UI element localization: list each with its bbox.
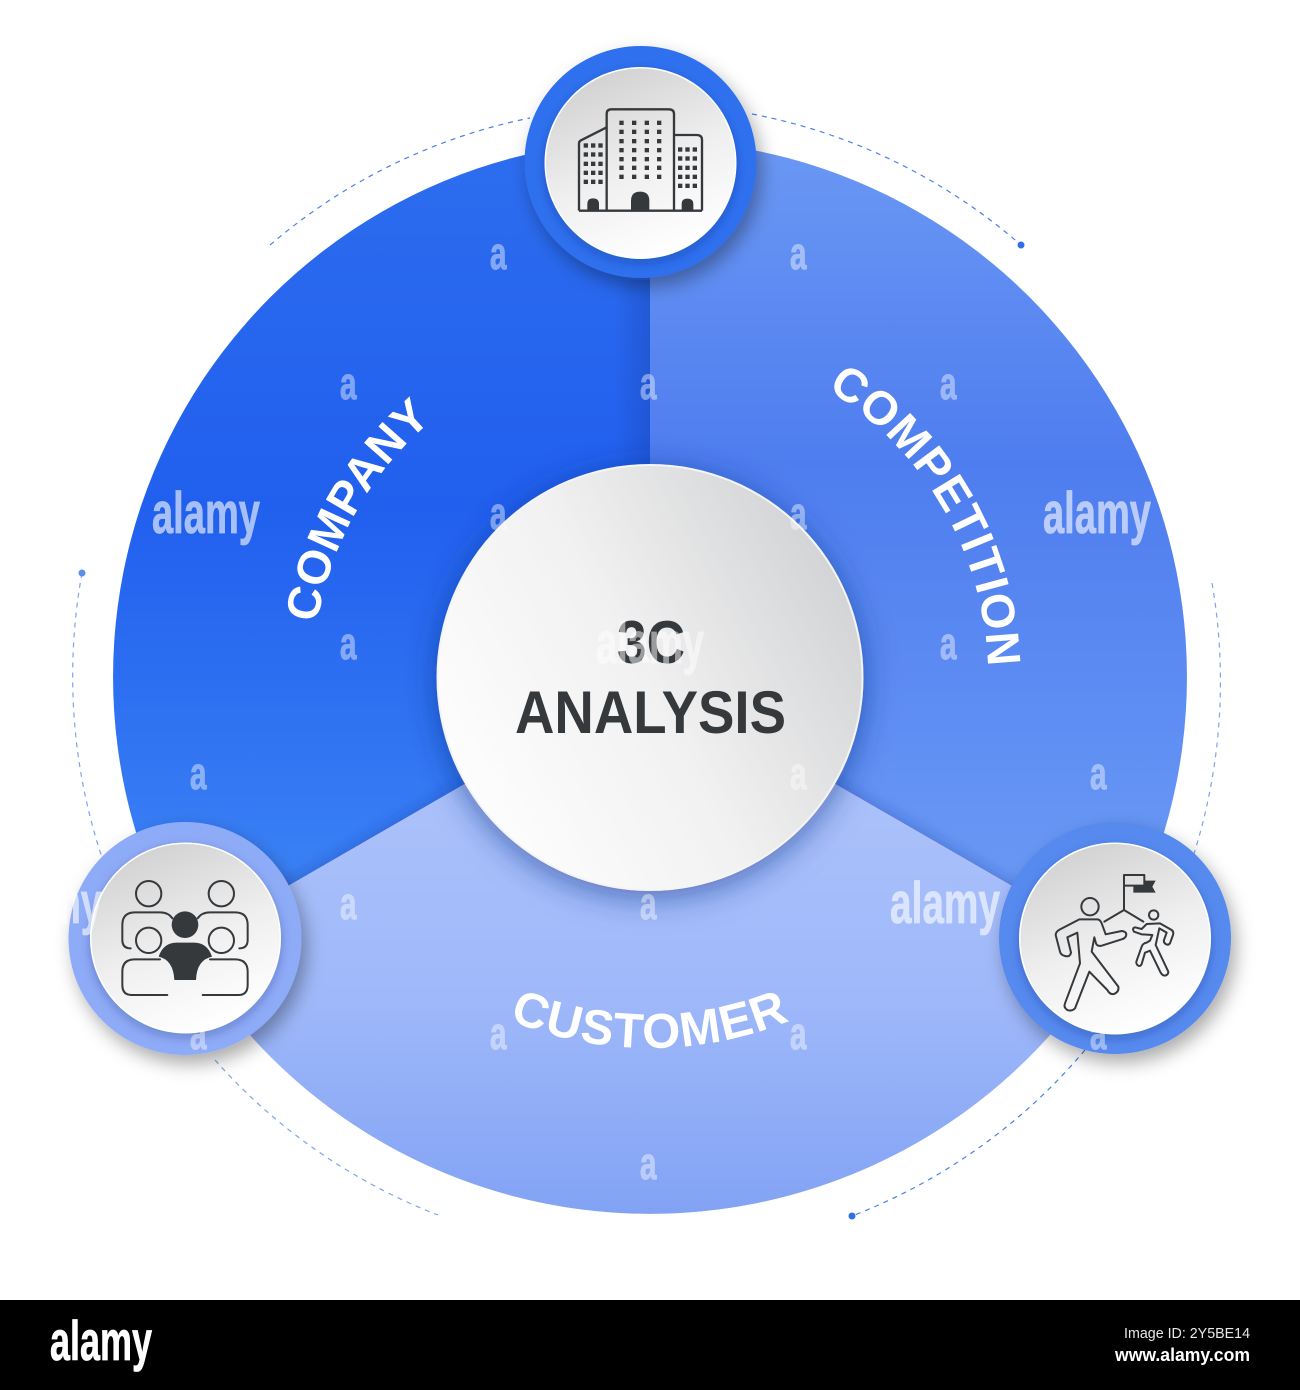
watermark overlay: a [790, 1009, 807, 1060]
badge: company building [524, 46, 756, 278]
watermark overlay: a [340, 359, 357, 410]
watermark overlay: a [1090, 749, 1107, 800]
watermark overlay: alamy [152, 481, 260, 546]
watermark overlay: a [490, 229, 507, 280]
badge: customer people [68, 822, 302, 1055]
panel: competition sector [650, 140, 1187, 946]
center title: 3C [617, 609, 685, 676]
label: customer: CUSTOMER [515, 993, 789, 1048]
watermark overlay: a [640, 879, 657, 930]
panel: customer sector [250, 780, 1050, 1214]
watermark overlay: a [190, 749, 207, 800]
watermark overlay: a [1090, 1009, 1107, 1060]
footer image id [1114, 1325, 1250, 1365]
watermark overlay: a [940, 619, 957, 670]
watermark overlay: a [340, 879, 357, 930]
watermark overlay: a [790, 229, 807, 280]
center title [515, 609, 786, 746]
sector divider shadow [615, 280, 650, 480]
icon: runners and flag [1056, 875, 1173, 1011]
watermark overlay: a [490, 1009, 507, 1060]
icon: group of people [122, 881, 248, 995]
watermark overlay: a [340, 619, 357, 670]
watermark overlay: a [490, 489, 507, 540]
label: company: COMPANY [288, 396, 424, 618]
label: competition: COMPETITION [834, 368, 1020, 664]
watermark overlay [0, 229, 1151, 1190]
footer logo: alamy [50, 1309, 152, 1372]
watermark overlay: alamy [596, 611, 704, 676]
watermark overlay: alamy [890, 871, 1000, 936]
center title: ANALYSIS [515, 679, 786, 746]
footer image id: Image ID: 2Y5BE14 [1124, 1325, 1250, 1342]
watermark overlay: a [640, 1139, 657, 1190]
footer image id: www.alamy.com [1114, 1345, 1250, 1365]
watermark overlay: a [190, 1009, 207, 1060]
panel: company sector [113, 140, 650, 946]
center circle [436, 464, 864, 891]
watermark overlay: alamy [1043, 481, 1151, 546]
dashed orbit arcs [73, 114, 1220, 1220]
watermark overlay: a [490, 749, 507, 800]
watermark overlay: a [640, 359, 657, 410]
watermark overlay: a [940, 359, 957, 410]
watermark overlay: a [790, 489, 807, 540]
icon: buildings [579, 109, 702, 211]
watermark overlay: a [790, 749, 807, 800]
footer bar [0, 1300, 1300, 1390]
badge: competition runners [999, 822, 1231, 1054]
